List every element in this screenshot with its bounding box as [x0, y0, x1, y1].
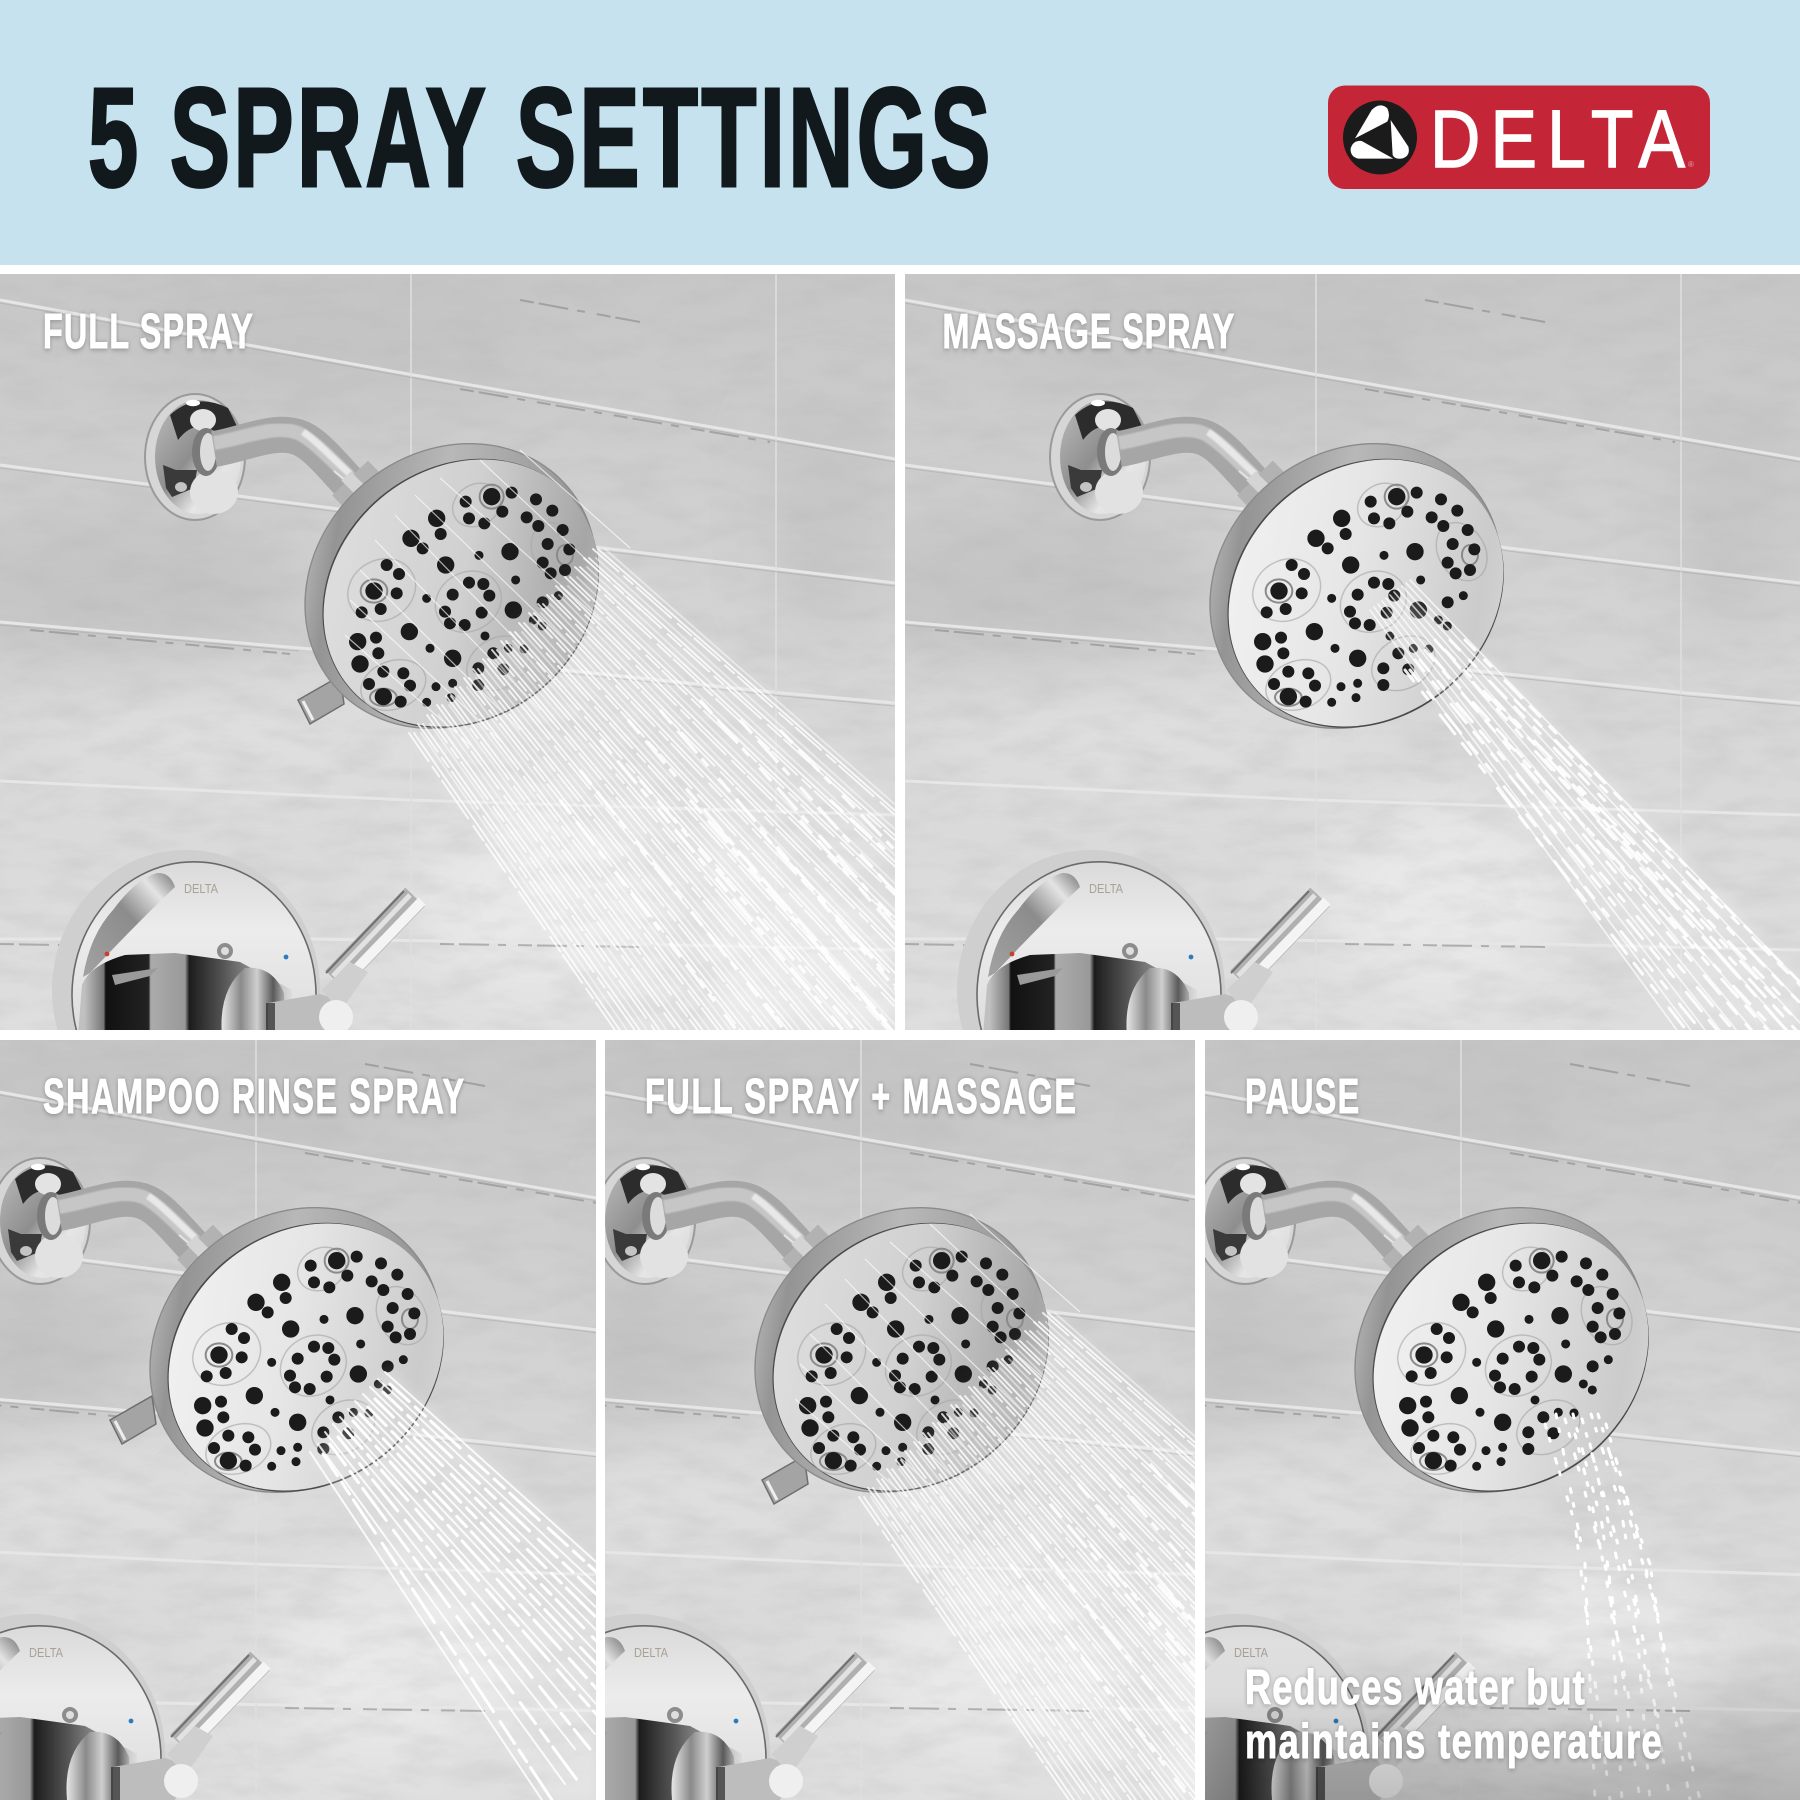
shower arm [0, 1158, 230, 1284]
header band [0, 0, 1800, 265]
label: PAUSE [1245, 1068, 1359, 1124]
caption [1245, 1661, 1662, 1769]
panel: pause [1205, 1040, 1800, 1800]
Delta logo [1328, 86, 1710, 189]
shower arm [1050, 394, 1290, 520]
valve trim [502, 1614, 872, 1800]
panel: full spray [0, 274, 895, 1030]
water: pause droplets [1545, 1414, 1700, 1800]
shower arm [1195, 1158, 1435, 1284]
shower head [247, 385, 654, 787]
label: FULL SPRAY [43, 303, 253, 359]
selector tab [298, 676, 344, 724]
panel: full spray + massage [605, 1040, 1195, 1800]
Delta logo: ® [1688, 160, 1694, 169]
valve trim [1102, 1614, 1472, 1800]
shower head [1297, 1149, 1704, 1551]
title: 5 SPRAY SETTINGS [88, 60, 990, 217]
label: FULL SPRAY + MASSAGE [645, 1068, 1076, 1124]
bottom shade [1205, 1644, 1800, 1800]
water: full spray [345, 450, 1025, 1036]
valve trim [0, 1614, 267, 1800]
valve trim [52, 850, 422, 1036]
selector tab [762, 1456, 808, 1504]
water: full spray and massage [795, 1214, 1475, 1800]
panel: shampoo rinse spray [0, 1040, 596, 1800]
water: massage jet [1370, 580, 1800, 1185]
water: shampoo rinse [310, 1369, 615, 1800]
selector tab [110, 1396, 156, 1444]
caption: maintains temperature [1245, 1715, 1662, 1769]
label: SHAMPOO RINSE SPRAY [43, 1068, 464, 1124]
Delta logo: DELTA [1430, 94, 1685, 185]
valve trim [957, 850, 1327, 1036]
caption: Reduces water but [1245, 1661, 1585, 1715]
panel: massage spray [905, 274, 1800, 1030]
shower arm [595, 1158, 835, 1284]
label: MASSAGE SPRAY [942, 303, 1234, 359]
shower head [697, 1149, 1104, 1551]
shower head [1152, 385, 1559, 787]
shower arm [145, 394, 385, 520]
shower head [92, 1149, 499, 1551]
